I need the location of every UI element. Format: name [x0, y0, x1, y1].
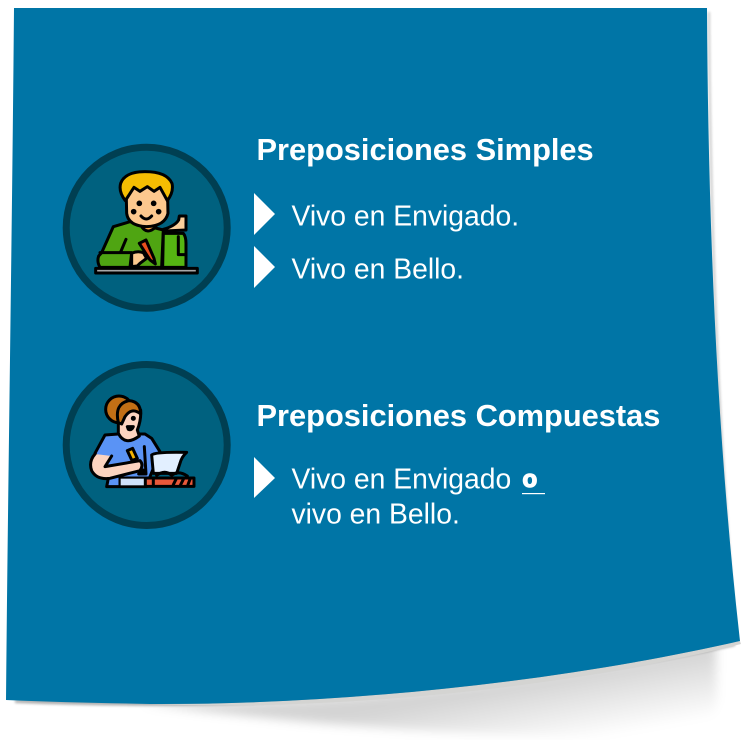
text: vivo en envigado o vivo en bello	[292, 462, 545, 530]
heading: preposiciones compuestas: Preposiciones Compuestas	[256, 398, 660, 433]
icon: boy writing	[96, 172, 197, 273]
icon circle	[66, 364, 227, 526]
text: vivo en envigado o vivo en bello: vivo en Bello.	[292, 498, 460, 530]
icon: woman writing	[91, 396, 194, 487]
curled page underside	[150, 641, 741, 705]
arrow bullet 1	[254, 193, 275, 235]
heading: preposiciones simples: Preposiciones Simples	[256, 132, 594, 167]
text: vivo en envigado o vivo en bello: Vivo en Envigado	[292, 462, 511, 494]
text: vivo en envigado: Vivo en Envigado.	[292, 200, 519, 232]
arrow bullet 2	[254, 246, 275, 288]
panel: preposiciones simples icon	[66, 147, 227, 308]
panel: preposiciones compuestas icon	[66, 364, 227, 526]
icon circle	[66, 147, 227, 308]
text: vivo en bello: Vivo en Bello.	[292, 252, 464, 284]
text: vivo en envigado o vivo en bello: o	[522, 466, 537, 493]
arrow bullet 3	[254, 457, 275, 498]
